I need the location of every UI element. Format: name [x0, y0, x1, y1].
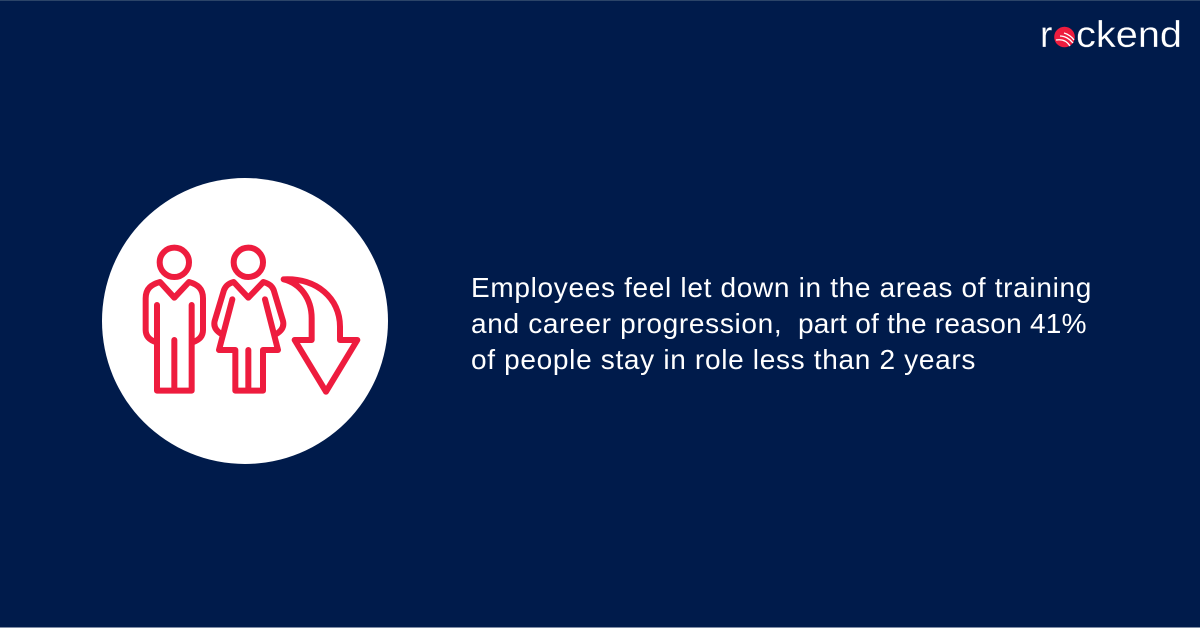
logo: rockend: r — [1040, 14, 1052, 55]
icon: man — [146, 248, 203, 391]
logo: rockend — [1040, 14, 1182, 55]
logo: rockend: ckend — [1076, 14, 1182, 55]
icon: woman — [214, 248, 283, 391]
white circle with icon — [102, 178, 388, 464]
icon: curved down arrow — [284, 279, 357, 392]
message text: Employees feel let down in the areas of training and career progression, part of the reason 41% of people stay in role less than 2 years — [471, 272, 1092, 375]
